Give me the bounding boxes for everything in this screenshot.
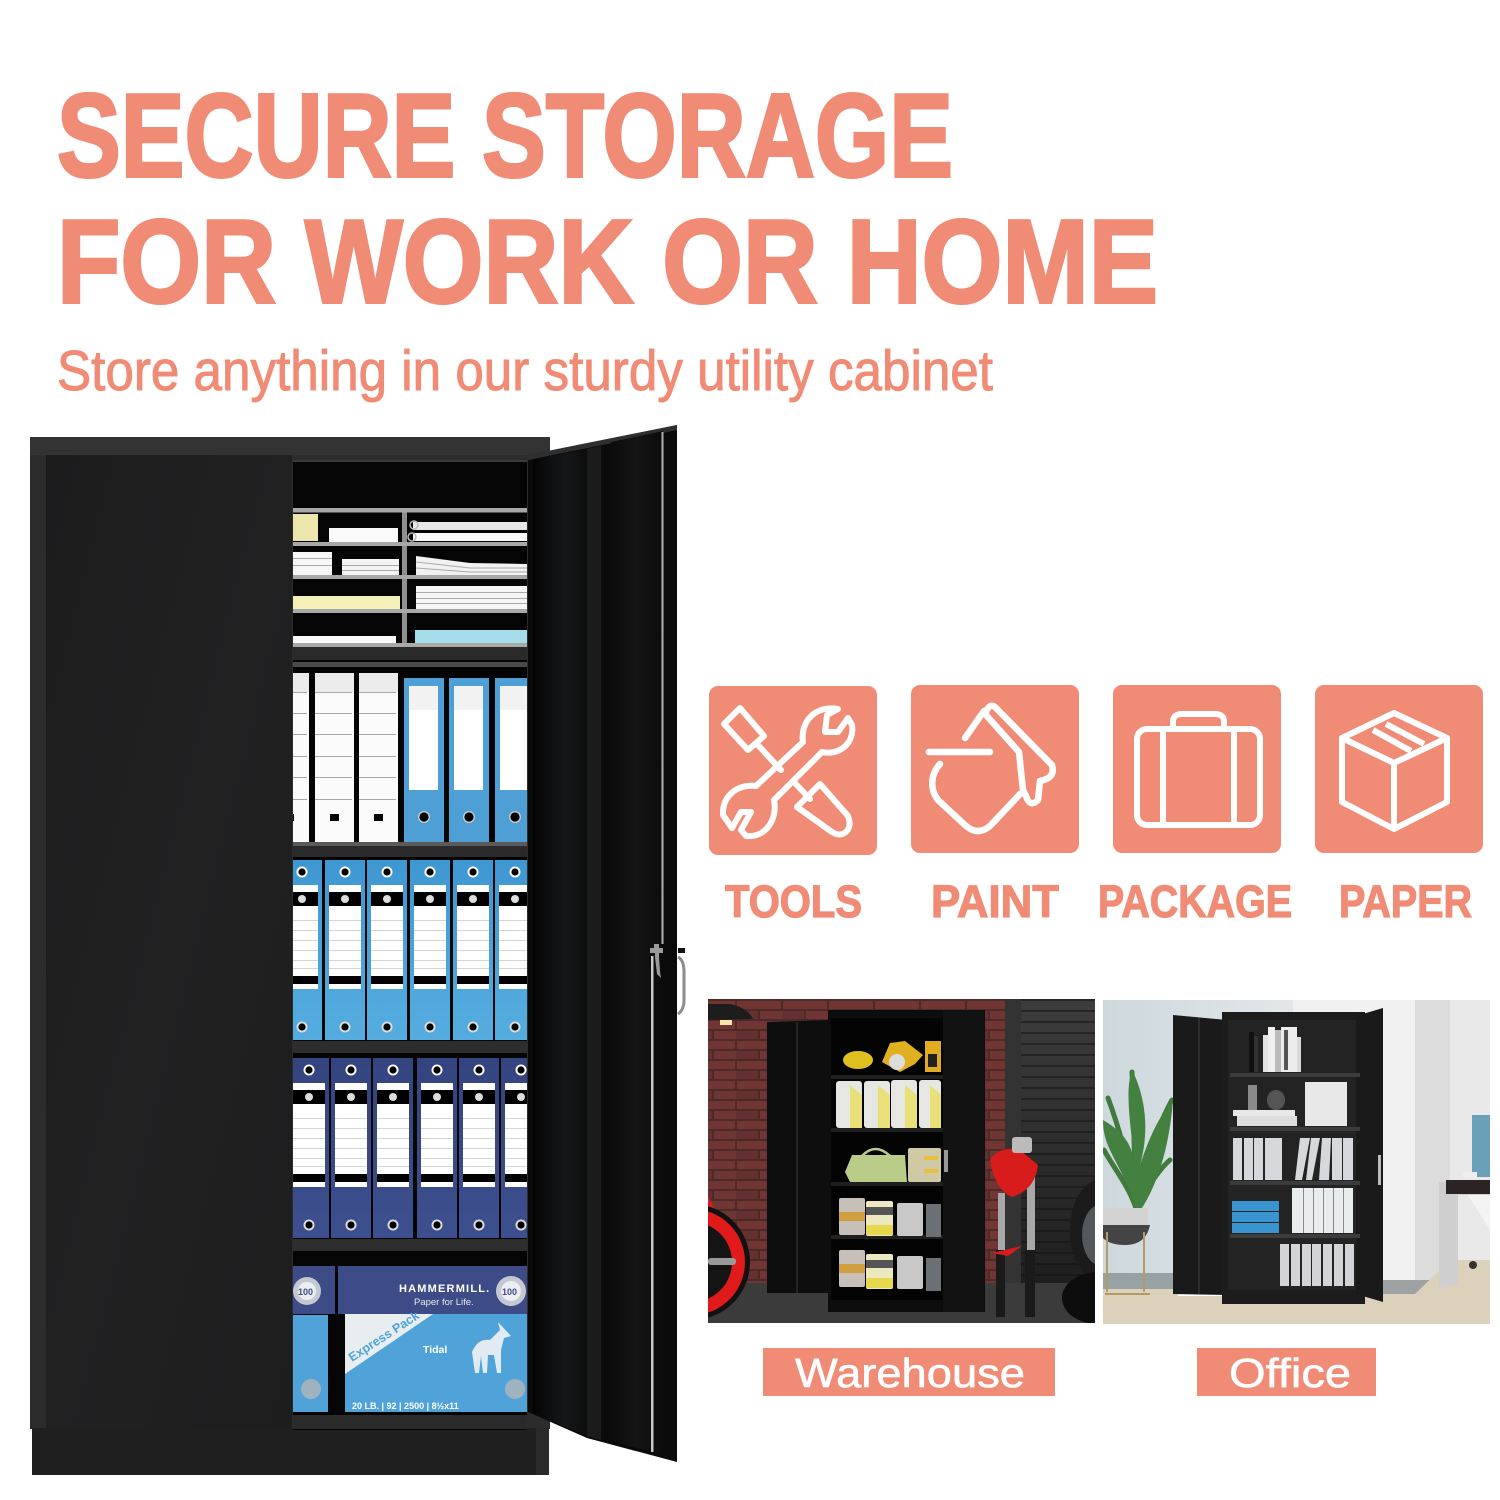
shelf <box>293 1041 527 1053</box>
door chrome edge, latch and lock rod <box>650 432 664 1452</box>
paper boxes: Express Pack <box>346 1308 422 1365</box>
bottom row binders <box>1280 1244 1354 1286</box>
floor <box>708 1283 1095 1323</box>
paper boxes: Tidal <box>423 1344 447 1356</box>
binder row 3: navy <box>289 1058 541 1238</box>
cabinet <box>30 425 685 1475</box>
motorcycle front fork and fender <box>990 1137 1038 1317</box>
decor and stacked folders <box>1233 1082 1347 1126</box>
office floor <box>1103 1260 1490 1324</box>
brick wall <box>708 999 1020 1289</box>
icon: box <box>1342 713 1447 829</box>
icon card: package <box>1113 685 1281 853</box>
title: SECURE STORAGE <box>57 70 953 202</box>
caption: office: Office <box>1229 1350 1351 1396</box>
caption: office <box>1197 1348 1376 1396</box>
bottom shelf <box>293 1415 527 1429</box>
icon labels: PAPER <box>1339 876 1472 927</box>
paint cans <box>839 1198 941 1291</box>
icon labels: PAINT <box>931 876 1059 927</box>
binder row 1: white and blue <box>293 673 527 842</box>
shutter door <box>1005 999 1095 1289</box>
motorcycle wheel <box>708 1196 750 1318</box>
cabinet body frame <box>30 437 550 1429</box>
shelf <box>293 1239 527 1251</box>
bag and toolbox <box>845 1148 941 1182</box>
icon: suitcase <box>1137 714 1260 825</box>
blue boxes <box>1232 1201 1279 1233</box>
oil bottles <box>836 1080 941 1128</box>
title <box>57 70 1158 328</box>
organizer shelves with paper <box>293 508 527 647</box>
tools on shelf <box>843 1041 941 1072</box>
books <box>1249 1027 1301 1072</box>
warehouse cabinet <box>767 1010 985 1312</box>
closed left door <box>46 455 292 1428</box>
desk and chair <box>1439 1115 1490 1288</box>
subtitle: Store anything in our sturdy utility cabinet <box>57 339 993 403</box>
paper boxes: 20 LB. | 92 | 2500 | 8½x11 <box>352 1401 459 1411</box>
photo: warehouse garage <box>708 999 1095 1323</box>
caption: warehouse <box>763 1348 1055 1396</box>
icon card: paper <box>1315 685 1483 853</box>
paper boxes <box>293 1266 527 1412</box>
open right door <box>528 425 685 1462</box>
icon labels <box>725 876 1472 927</box>
office cabinet <box>1173 1008 1383 1304</box>
binder row 2: blue <box>282 860 535 1040</box>
shelf band <box>293 647 527 667</box>
icon: screwdriver and wrench <box>723 708 852 836</box>
title: FOR WORK OR HOME <box>57 196 1158 328</box>
cabinet top band <box>30 437 550 455</box>
cabinet interior <box>293 460 527 1430</box>
icon card: paint <box>911 685 1079 853</box>
potted plant <box>1103 1070 1173 1294</box>
grey binders row <box>1233 1138 1353 1180</box>
paper boxes: Paper for Life. <box>414 1297 474 1308</box>
white binders <box>1292 1188 1353 1233</box>
cabinet base plinth <box>32 1428 549 1475</box>
caption: warehouse: Warehouse <box>795 1350 1025 1396</box>
paper boxes: HAMMERMILL. <box>399 1283 490 1295</box>
paper boxes: 100 <box>298 1287 313 1297</box>
photo: office <box>1103 1000 1490 1324</box>
paper boxes: 100 <box>502 1287 517 1297</box>
icon labels: TOOLS <box>725 876 862 927</box>
icon: paint bucket pouring <box>929 706 1053 831</box>
icon card: tools <box>709 686 877 855</box>
icon labels: PACKAGE <box>1098 876 1292 927</box>
shelf <box>293 842 527 857</box>
outer door handle <box>678 948 685 1014</box>
spare tires <box>1062 1181 1095 1323</box>
wall lamp <box>708 1004 753 1025</box>
office walls <box>1103 1000 1490 1294</box>
